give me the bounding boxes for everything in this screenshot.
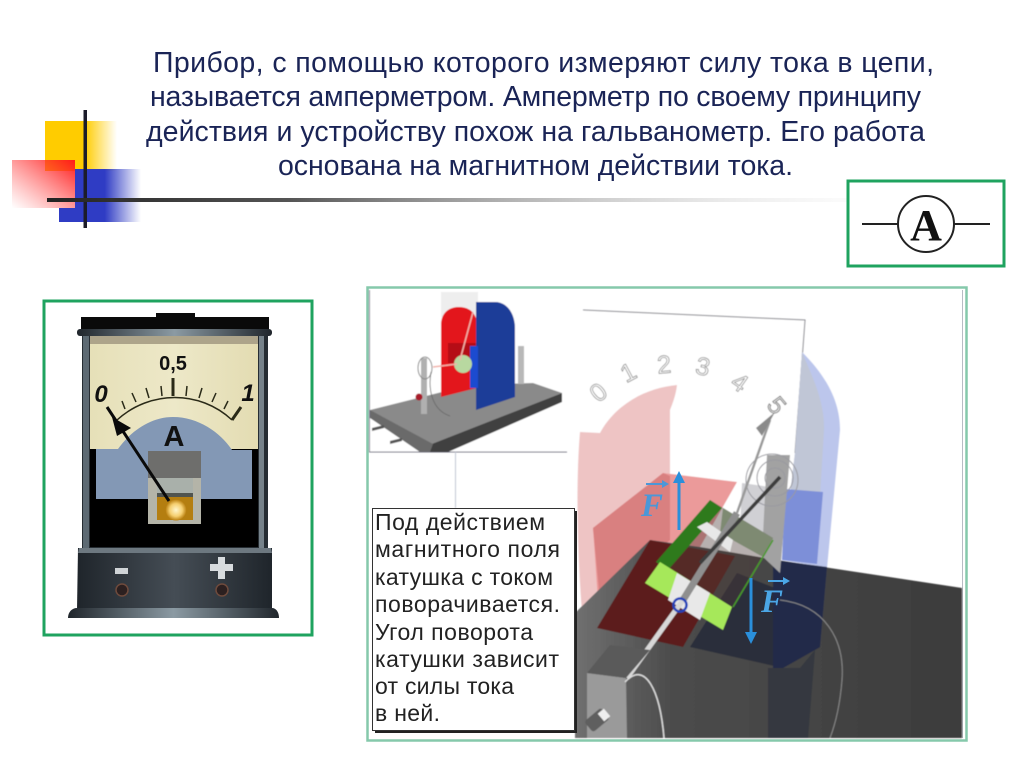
scale numbers <box>584 350 791 420</box>
title: называется амперметром. Амперметр по своему принципу <box>150 81 922 113</box>
scale numbers: 2 <box>656 350 672 380</box>
shaft bracket <box>762 455 790 573</box>
left post <box>416 357 450 416</box>
title: действия и устройству похож на гальванометр. Его работа <box>146 116 925 148</box>
panel: ammeter photo <box>44 301 312 635</box>
decorative corner squares and rule <box>12 110 857 228</box>
callout: explanation text: катушка с током <box>375 564 553 590</box>
panel: ammeter circuit symbol <box>848 181 1004 266</box>
callout: explanation text <box>372 508 577 733</box>
right post <box>518 346 524 384</box>
blue magnet ghost <box>782 352 840 568</box>
scale numbers: 4 <box>726 367 753 398</box>
callout: explanation text: катушки зависит <box>375 646 559 672</box>
dial numbers: 0 <box>94 381 108 408</box>
callout: explanation text: поворачивается. <box>375 591 560 617</box>
thin wire <box>780 600 842 738</box>
coil disc <box>454 355 472 373</box>
callout: explanation text: Угол поворота <box>375 619 533 645</box>
scale numbers: 1 <box>616 357 641 389</box>
panel: galvanometer illustration <box>368 288 966 740</box>
needle <box>107 407 169 501</box>
scale card <box>575 310 805 590</box>
force arrow: up with F: F <box>640 488 663 524</box>
callout: explanation text: магнитного поля <box>375 536 560 562</box>
scale card <box>441 292 478 317</box>
dark floor <box>575 540 962 738</box>
blue magnet <box>476 302 515 410</box>
force arrow: up with F <box>640 471 685 530</box>
plus terminal <box>210 557 233 596</box>
scale numbers: 0 <box>584 378 613 408</box>
blue arch plate <box>96 417 252 499</box>
meter base <box>77 548 272 610</box>
upper band <box>77 329 272 336</box>
terminals <box>372 425 402 444</box>
minus terminal <box>115 568 128 596</box>
panel: ammeter circuit symbol: A <box>910 201 942 250</box>
dial numbers: 1 <box>241 380 255 407</box>
red magnet <box>441 307 477 397</box>
red magnet ghost <box>578 385 677 612</box>
coil <box>645 500 773 630</box>
shaft and pointer <box>627 412 780 678</box>
black lower dial <box>90 449 258 547</box>
terminal block <box>584 645 664 738</box>
force arrow: down with F <box>745 577 790 644</box>
title <box>146 47 934 182</box>
magnet block <box>148 451 201 524</box>
meter case <box>82 332 268 550</box>
title: Прибор, с помощью которого измеряют силу тока в цепи, <box>153 47 934 79</box>
callout: explanation text: Под действием <box>375 509 545 535</box>
title: основана на магнитном действии тока. <box>278 150 793 182</box>
callout: explanation text: в ней. <box>375 700 440 726</box>
large view <box>575 310 962 738</box>
small overview model <box>369 290 567 508</box>
meter top cap <box>81 313 269 330</box>
force arrow: down with F: F <box>760 584 783 620</box>
dial face <box>90 336 258 449</box>
scale numbers: 3 <box>693 352 713 382</box>
base plate <box>370 383 562 452</box>
pointer <box>433 312 473 367</box>
dial numbers: 0,5 <box>159 353 187 375</box>
dial numbers <box>94 353 255 453</box>
scale <box>117 378 241 420</box>
callout: explanation text: от силы тока <box>375 673 514 699</box>
scale numbers: 5 <box>761 391 791 420</box>
dial numbers: A <box>164 421 185 453</box>
